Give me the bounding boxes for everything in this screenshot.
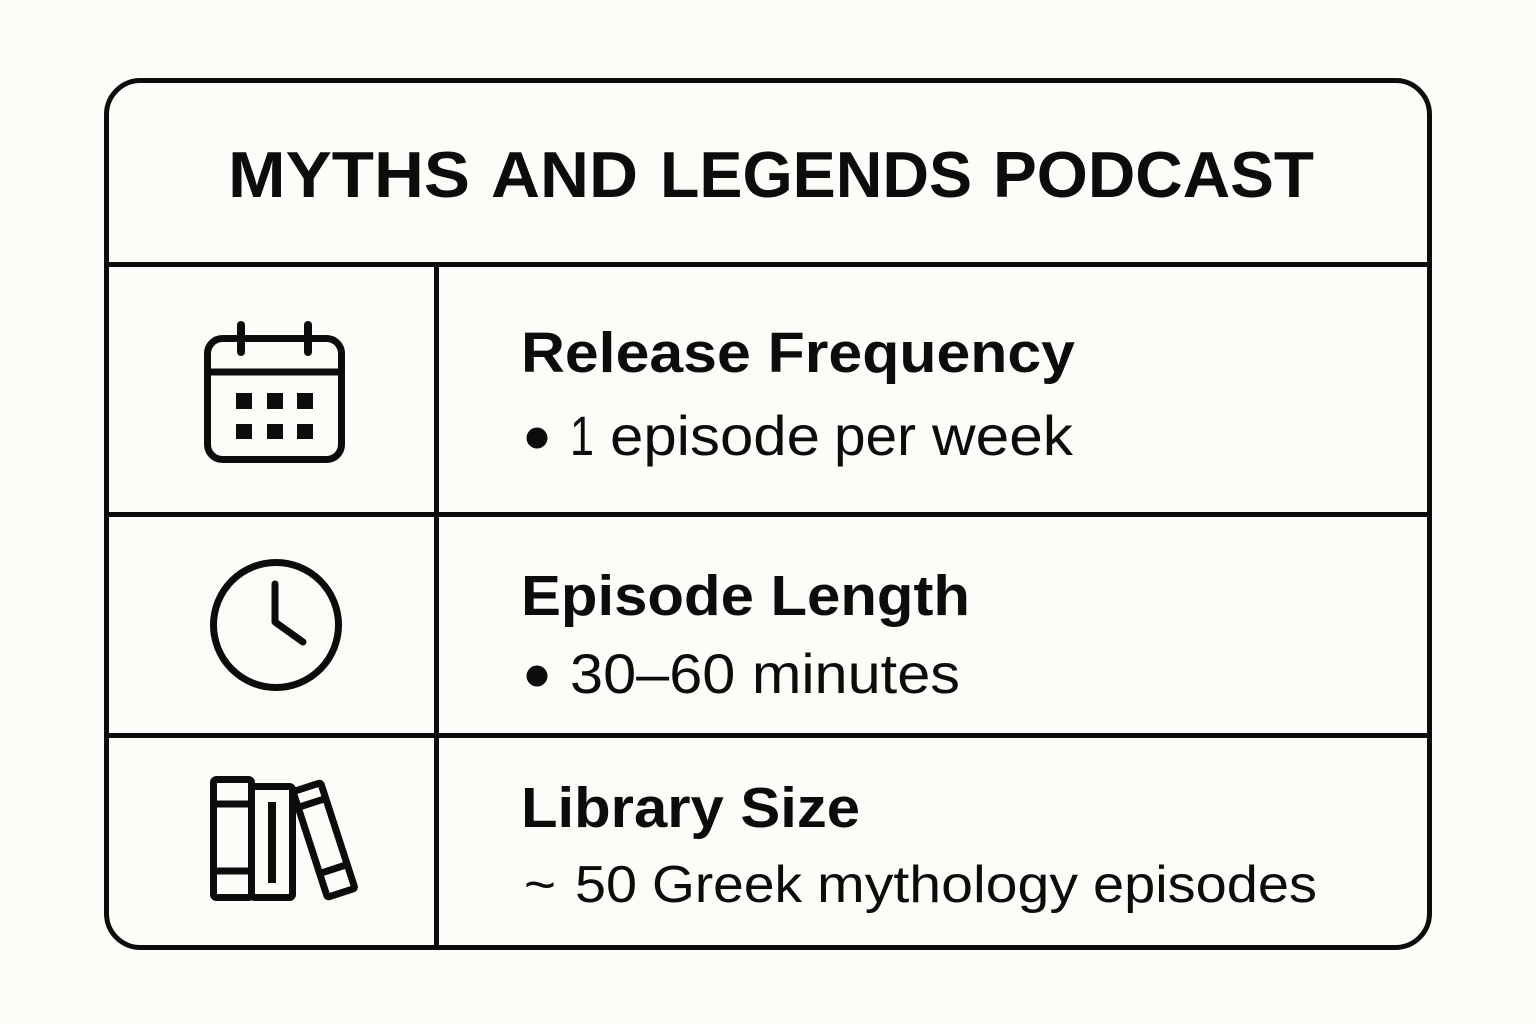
row text: library size: Library Size <box>521 776 860 840</box>
row text: release frequency: per <box>834 404 916 467</box>
row text: library size: 50 <box>575 856 637 914</box>
row text: library size: ~ <box>524 856 556 914</box>
row text: episode length <box>521 564 970 705</box>
title <box>228 138 1314 211</box>
row text: release frequency <box>521 321 1075 467</box>
title: LEGENDS <box>660 138 972 211</box>
table card <box>106 80 1430 948</box>
title: PODCAST <box>993 138 1314 211</box>
title: AND <box>491 138 638 211</box>
icon: clock <box>214 562 338 688</box>
row text: episode length: Episode Length <box>521 564 970 628</box>
row text: library size: episodes <box>1093 856 1317 914</box>
row text: library size: Greek <box>652 856 803 914</box>
icon: calendar <box>207 325 342 460</box>
row text: library size: mythology <box>817 856 1078 914</box>
icon: books <box>213 780 355 898</box>
row text: release frequency: week <box>931 404 1074 467</box>
row text: episode length: 30–60 minutes <box>570 642 960 705</box>
row text: release frequency: Release Frequency <box>521 321 1075 385</box>
row text: release frequency: 1 <box>570 404 594 467</box>
row text: release frequency: episode <box>610 404 820 467</box>
row text: library size <box>521 776 1317 914</box>
title: MYTHS <box>228 138 470 211</box>
